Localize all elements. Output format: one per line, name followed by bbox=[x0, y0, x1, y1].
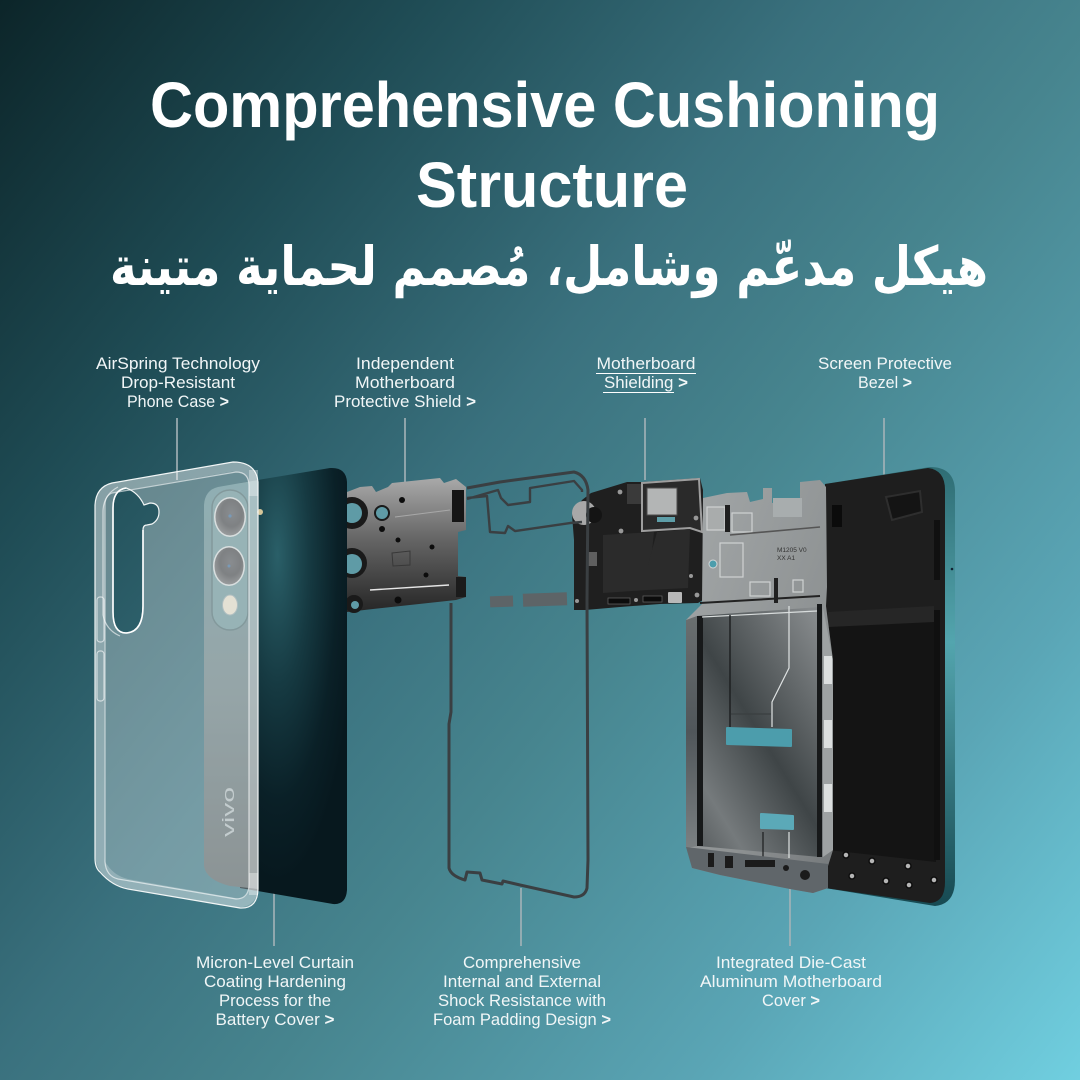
label: curtain coating: Micron-Level Curtain bbox=[196, 954, 354, 972]
die-cast aluminum cover bbox=[686, 480, 833, 893]
label: motherboard protective shield: Motherboard bbox=[355, 374, 455, 392]
leader lines bbox=[177, 418, 884, 946]
label: die-cast cover bbox=[700, 954, 882, 1010]
label: curtain coating bbox=[196, 954, 354, 1029]
label: foam padding: Comprehensive bbox=[463, 954, 581, 972]
label: die-cast cover: Cover > bbox=[762, 992, 820, 1010]
label: foam padding: Shock Resistance with bbox=[438, 992, 606, 1010]
tray bbox=[686, 616, 698, 848]
label: foam padding: Foam Padding Design > bbox=[433, 1011, 611, 1029]
vivo logo: vivo bbox=[219, 787, 238, 837]
label: motherboard shielding: Motherboard bbox=[596, 355, 696, 373]
label: airspring phone case bbox=[96, 355, 261, 411]
camera island bbox=[212, 490, 248, 630]
side metal strip bbox=[823, 608, 833, 857]
camera bracket bbox=[642, 479, 702, 532]
label: motherboard shielding: Shielding > bbox=[604, 374, 688, 392]
label: airspring phone case: AirSpring Technology bbox=[96, 355, 261, 373]
label: motherboard protective shield: Protective Shield > bbox=[334, 393, 476, 411]
die-cast aluminum cover: M1205 V0 bbox=[777, 547, 807, 554]
phone back band bbox=[204, 480, 263, 889]
label: screen protective bezel: Bezel > bbox=[858, 374, 912, 392]
label: foam padding: Internal and External bbox=[443, 973, 601, 991]
label: motherboard protective shield: Independent bbox=[356, 355, 454, 373]
title: Structure bbox=[416, 149, 688, 221]
label: foam padding bbox=[433, 954, 611, 1029]
label: curtain coating: Coating Hardening bbox=[204, 973, 346, 991]
foam padding gasket bbox=[449, 472, 588, 897]
label: curtain coating: Battery Cover > bbox=[216, 1011, 334, 1029]
transparent phone case bbox=[95, 462, 258, 908]
foam pad bbox=[490, 592, 567, 607]
case bumper rim bbox=[100, 467, 253, 903]
label: curtain coating: Process for the bbox=[219, 992, 331, 1010]
label: motherboard shielding bbox=[596, 355, 696, 392]
title: Comprehensive Cushioning bbox=[150, 69, 940, 141]
label: die-cast cover: Aluminum Motherboard bbox=[700, 973, 882, 991]
label: screen protective bezel bbox=[818, 355, 952, 392]
label: motherboard protective shield bbox=[334, 355, 476, 411]
battery cover bbox=[240, 468, 347, 904]
title bbox=[150, 69, 940, 221]
die-cast aluminum cover: XX A1 bbox=[777, 555, 795, 562]
label: screen protective bezel: Screen Protective bbox=[818, 355, 952, 373]
top plate details bbox=[707, 507, 803, 596]
label: die-cast cover: Integrated Die-Cast bbox=[716, 954, 866, 972]
motherboard protective shield bbox=[336, 478, 466, 613]
label: airspring phone case: Drop-Resistant bbox=[121, 374, 235, 392]
shield panels bbox=[603, 532, 654, 593]
bottom bracket bbox=[686, 847, 828, 893]
cutouts bbox=[727, 728, 791, 746]
back display and bezel bbox=[825, 467, 955, 906]
motherboard bbox=[572, 478, 703, 610]
label: airspring phone case: Phone Case > bbox=[127, 393, 229, 411]
